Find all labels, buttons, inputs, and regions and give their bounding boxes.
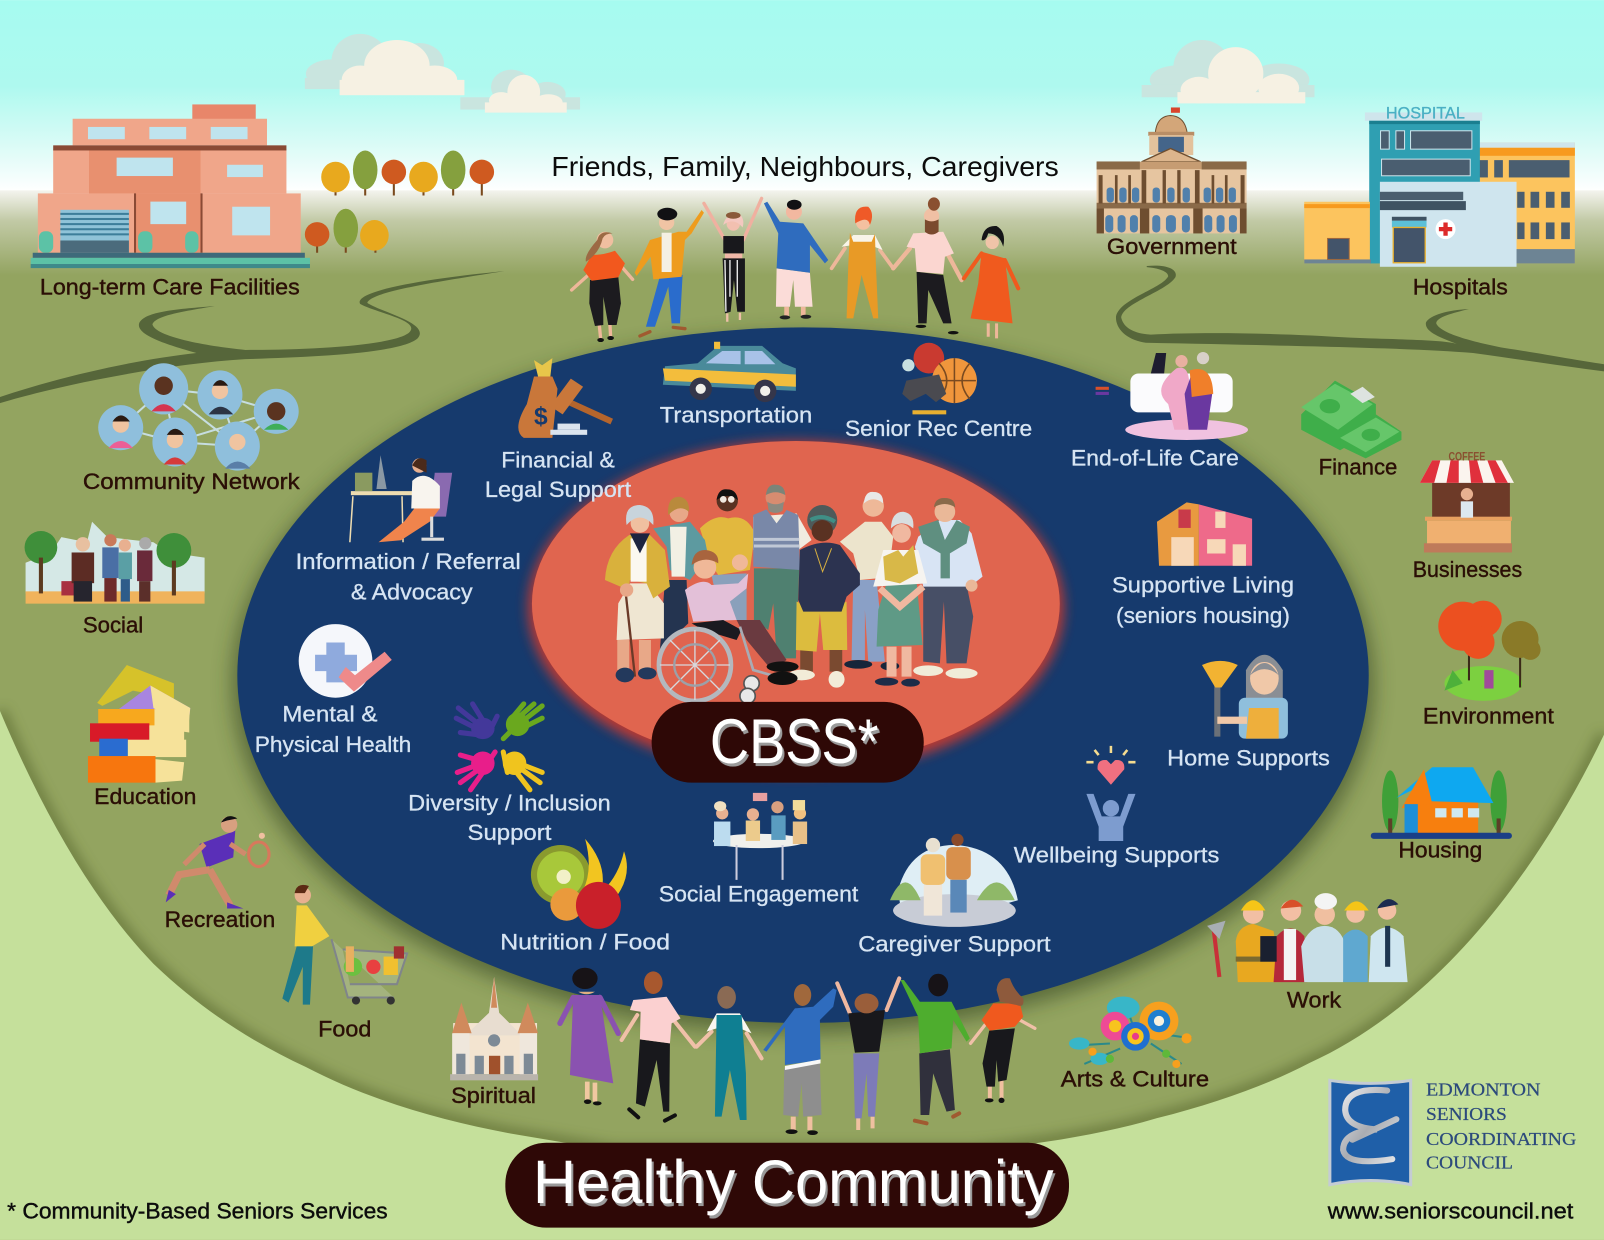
- clouds: [305, 34, 1315, 113]
- label: information referral advocacy: & Advocacy: [351, 580, 473, 605]
- label: home supports: Home Supports: [1167, 745, 1330, 770]
- icon: supportive living houses: [1157, 502, 1252, 566]
- person: man green sweater: [901, 974, 970, 1123]
- icon: home supports worker: [1202, 655, 1288, 739]
- icon: community network: [98, 363, 299, 471]
- label: mental and physical health: Mental &: [282, 701, 377, 726]
- senior: man cream sweater: [840, 492, 899, 670]
- icon: arts and culture flowers: [1069, 996, 1192, 1068]
- senior: woman in wheelchair: [659, 550, 799, 704]
- logo: Edmonton Seniors Coordinating Council: EDMONTON: [1426, 1080, 1541, 1100]
- label: supportive living: (seniors housing): [1116, 603, 1290, 628]
- senior: man bearded striped vest: [753, 485, 812, 658]
- label: caregiver support: Caregiver Support: [858, 931, 1051, 956]
- label: wellbeing supports: Wellbeing Supports: [1014, 842, 1219, 867]
- icon: end of life care sofa: [1096, 352, 1248, 440]
- icon: money bag and gavel: [518, 358, 612, 438]
- group: community people holding hands: [560, 968, 1035, 1135]
- icon: taxi: [663, 342, 796, 402]
- icon: diversity hands: [456, 704, 542, 790]
- label: mental and physical health: [255, 701, 411, 757]
- road: left winding path: [0, 271, 504, 403]
- person: woman orange top: [971, 978, 1035, 1103]
- senior: man yellow sweater: [700, 489, 755, 620]
- label: finance: Finance: [1319, 455, 1397, 480]
- icon: hospital: [1304, 103, 1575, 267]
- logo: Edmonton Seniors Coordinating Council: [1330, 1080, 1576, 1185]
- label: social engagement: Social Engagement: [659, 881, 859, 906]
- label: financial and legal support: Legal Support: [485, 477, 632, 502]
- label: recreation: Recreation: [165, 907, 275, 932]
- icon: mental and physical health: [299, 624, 392, 698]
- icon: workers: [1207, 893, 1408, 982]
- icon: caregiver support scene: [890, 834, 1018, 927]
- senior: woman yellow coat with cane: [605, 505, 670, 682]
- group: friends and family holding hands: [572, 197, 1018, 342]
- icon: information desk worker: [350, 455, 452, 542]
- person: purple dress: [560, 968, 618, 1105]
- icons: autumn trees: [305, 150, 494, 253]
- senior: woman dark top yellow shorts: [788, 505, 860, 688]
- icon: church: [450, 977, 538, 1080]
- icon: house: [1371, 767, 1512, 839]
- group: seniors at centre: [605, 485, 983, 704]
- icon: wellbeing heart and figure: [1086, 746, 1135, 841]
- icon: long-term care building: [31, 104, 310, 268]
- label: environment: Environment: [1423, 703, 1555, 728]
- icon: money stacks: [1301, 381, 1401, 458]
- label: nutrition and food: Nutrition / Food: [500, 929, 670, 954]
- icon: hospital: HOSPITAL: [1386, 103, 1465, 122]
- icon: shopper with cart: [282, 885, 407, 1005]
- label: government: Government: [1107, 234, 1238, 259]
- panel: blue services ellipse: [232, 327, 1374, 1033]
- label: education: Education: [94, 784, 196, 809]
- pill: CBSS: [652, 702, 924, 783]
- icon: social engagement table: [713, 793, 807, 880]
- icon: fruit: [531, 839, 627, 929]
- person: woman black top striped pants: [704, 198, 762, 322]
- person: bearded man pink shirt: [893, 197, 962, 334]
- icon: coffee stall: COFFEE: [1449, 449, 1485, 463]
- senior: woman teal cardigan: [653, 497, 708, 650]
- label: diversity inclusion support: [408, 790, 611, 845]
- label: transportation: Transportation: [660, 403, 812, 428]
- icon: environment trees and park: [1438, 601, 1541, 701]
- label: businesses: Businesses: [1413, 557, 1522, 582]
- label: spiritual: Spiritual: [451, 1083, 536, 1108]
- label: social: Social: [83, 612, 143, 637]
- icon: senior rec sports items: [902, 343, 977, 412]
- label: food: Food: [318, 1016, 371, 1041]
- person: woman orange overalls: [832, 207, 893, 318]
- icon: social group in park: [25, 522, 205, 604]
- label: work: Work: [1287, 988, 1342, 1013]
- sky background: [0, 0, 1604, 191]
- person: woman black top: [837, 978, 899, 1130]
- logo shield: [1330, 1080, 1411, 1185]
- label: long-term care: Long-term Care Facilities: [40, 275, 300, 300]
- label: community network: Community Network: [83, 469, 301, 494]
- website: www.seniorscouncil.net: [1327, 1198, 1574, 1223]
- icon: money bag and gavel: $: [534, 404, 548, 431]
- person: woman orange top: [572, 232, 633, 342]
- label: diversity inclusion support: Diversity / Inclusion: [408, 790, 611, 815]
- icon: tennis player: [166, 816, 269, 908]
- label: financial and legal support: [485, 448, 632, 502]
- label: supportive living: [1112, 572, 1294, 628]
- person: man blue sweater pink shorts: [764, 200, 828, 319]
- pill: CBSS: CBSS*: [710, 707, 879, 777]
- label: financial and legal support: Financial &: [501, 448, 615, 473]
- person: man pink shirt: [622, 971, 695, 1121]
- lower light green field with shadow edge: [0, 711, 1604, 1240]
- logo: Edmonton Seniors Coordinating Council: COORDINATING: [1426, 1129, 1576, 1149]
- label: hospitals: Hospitals: [1413, 275, 1508, 300]
- senior: woman mustard vest green skirt: [873, 512, 927, 687]
- person: woman orange dress: [964, 226, 1018, 338]
- icon: government building: [1097, 107, 1247, 233]
- pill: Healthy Community: Healthy Community: [533, 1148, 1054, 1217]
- label: information referral advocacy: [296, 549, 521, 605]
- label: arts and culture: Arts & Culture: [1061, 1066, 1209, 1091]
- logo: Edmonton Seniors Coordinating Council: COUNCIL: [1426, 1152, 1513, 1172]
- icon: stack of books: [88, 665, 190, 783]
- person: man blue shirt grey shorts: [763, 984, 837, 1135]
- logo: Edmonton Seniors Coordinating Council: SENIORS: [1426, 1104, 1507, 1124]
- person: teal overalls: [697, 986, 762, 1120]
- label: end-of-life care: End-of-Life Care: [1071, 446, 1239, 471]
- footnote: * Community-Based Seniors Services: [7, 1198, 388, 1223]
- label: supportive living: Supportive Living: [1112, 572, 1294, 597]
- label: housing: Housing: [1398, 837, 1482, 862]
- label: Friends, Family, Neighbours, Caregivers: Friends, Family, Neighbours, Caregivers: [551, 151, 1059, 182]
- road: right winding path: [1116, 266, 1604, 371]
- icon: coffee stall: [1420, 449, 1514, 552]
- label: mental and physical health: Physical Health: [255, 732, 411, 757]
- label: senior rec centre: Senior Rec Centre: [845, 416, 1032, 441]
- label: diversity inclusion support: Support: [467, 820, 552, 845]
- senior: man with green scarf: [913, 498, 983, 679]
- panel: red CBSS ellipse: [528, 441, 1064, 774]
- person: man yellow jacket: [635, 208, 704, 336]
- label: information referral advocacy: Information / Referral: [296, 549, 521, 574]
